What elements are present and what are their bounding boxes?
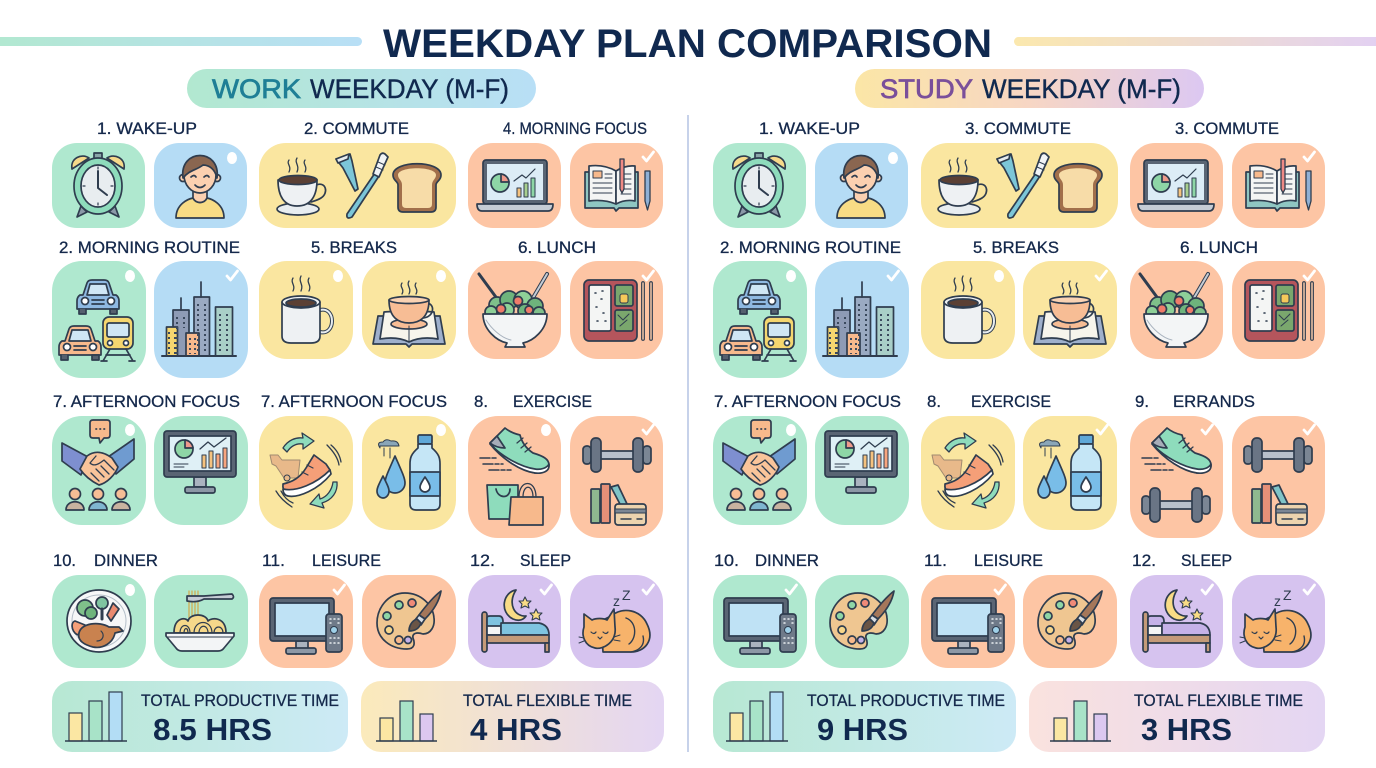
heading: 11. leisure: 11.	[262, 552, 285, 570]
title accent line: left	[0, 37, 362, 46]
stat card: total productive time	[713, 681, 1016, 752]
tile: tea on book	[1023, 261, 1117, 359]
tile: dumbbell, books, card	[570, 416, 663, 538]
heading: 9. errands	[1135, 393, 1255, 411]
panel: study weekday	[713, 69, 1325, 752]
tile: bed and moon	[1130, 575, 1223, 668]
heading: 10. dinner: DINNER	[94, 552, 158, 570]
tile: laptop chart	[1130, 143, 1223, 228]
tile: cart and shoe cycle	[921, 416, 1015, 530]
tile: alarm clock	[713, 143, 806, 228]
tile: tv and remote	[713, 575, 807, 668]
tile: water bottle	[1023, 416, 1117, 530]
heading: 3. commute: 3. COMMUTE	[965, 120, 1071, 138]
heading: 6. lunch: 6. LUNCH	[1180, 239, 1258, 257]
heading: 8. exercise: 8.	[927, 393, 941, 411]
heading: 11. leisure	[924, 552, 1043, 570]
tile: tea on book	[362, 261, 456, 359]
tile: person waking	[815, 143, 908, 228]
heading: 9. errands: 9.	[1135, 393, 1149, 411]
heading: 8. exercise: 8.	[474, 393, 488, 411]
tile: tv and remote	[921, 575, 1015, 668]
tile: sleeping cat: Z	[1283, 587, 1292, 603]
tile: coffee mug	[259, 261, 353, 359]
heading: 4. morning focus: 4. MORNING FOCUS	[503, 120, 647, 138]
stat card: total flexible time: TOTAL FLEXIBLE TIME	[1134, 692, 1303, 710]
heading: 10. dinner: 10.	[714, 552, 739, 570]
heading: 8. exercise	[474, 393, 592, 411]
stat card: total productive time	[52, 681, 348, 752]
tile: tv and remote	[259, 575, 353, 668]
tile: pasta	[154, 575, 248, 668]
heading: 12. sleep: SLEEP	[520, 552, 571, 570]
tile: city skyline	[815, 261, 909, 378]
heading pill: study weekday: STUDY	[880, 74, 973, 104]
bar chart icon	[376, 701, 437, 741]
tile: taxi, car, train	[52, 261, 146, 378]
tile: open book and pen	[1232, 143, 1325, 228]
tile: open book and pen	[570, 143, 663, 228]
tile: water bottle	[362, 416, 456, 530]
stat card: total flexible time: 4 HRS	[470, 712, 562, 747]
heading: 2. morning routine: 2. MORNING ROUTINE	[59, 239, 240, 257]
tile: coffee mug	[921, 261, 1015, 359]
title accent line: right	[1014, 37, 1376, 46]
heading: 8. exercise	[927, 393, 1051, 411]
heading: 5. breaks: 5. BREAKS	[311, 239, 397, 257]
stat card: total flexible time: 3 HRS	[1141, 712, 1232, 747]
heading: 12. sleep: SLEEP	[1181, 552, 1232, 570]
tile: cart and shoe cycle	[259, 416, 353, 530]
tile: sleeping cat	[570, 575, 663, 668]
tile: taxi, car, train	[713, 261, 807, 378]
panel: work weekday	[52, 69, 664, 752]
tile: alarm clock	[52, 143, 145, 228]
tile: bento and chopsticks	[1232, 261, 1325, 359]
tile: sleeping cat: Z	[622, 587, 631, 603]
stat card: total flexible time	[1029, 681, 1325, 752]
stat card: total productive time: 8.5 HRS	[153, 712, 272, 747]
heading: 12. sleep: 12.	[1132, 552, 1156, 570]
tile: paint palette	[362, 575, 456, 668]
heading: 8. exercise: EXERCISE	[513, 393, 592, 411]
stat card: total productive time: TOTAL PRODUCTIVE TIME	[807, 692, 1005, 710]
heading pill: work weekday: WORK	[212, 74, 301, 104]
tile: sleeping cat: z	[1274, 593, 1281, 609]
tile: handshake and team	[52, 416, 146, 525]
heading: 12. sleep	[470, 552, 571, 570]
heading: 11. leisure: LEISURE	[974, 552, 1043, 570]
tile: handshake and team	[713, 416, 807, 525]
tile: city skyline	[154, 261, 248, 378]
heading: 12. sleep	[1132, 552, 1232, 570]
heading: 11. leisure: LEISURE	[312, 552, 381, 570]
tile: sleeping cat: z	[613, 593, 620, 609]
column divider	[687, 115, 689, 752]
tile: sleeping cat	[1232, 575, 1325, 668]
heading pill: work weekday: WEEKDAY (M-F)	[310, 74, 509, 104]
stat card: total flexible time: TOTAL FLEXIBLE TIME	[463, 692, 632, 710]
stat card: total productive time: TOTAL PRODUCTIVE TIME	[141, 692, 339, 710]
tile: laptop chart	[468, 143, 561, 228]
heading: 9. errands: ERRANDS	[1173, 393, 1255, 411]
heading: 5. breaks: 5. BREAKS	[973, 239, 1059, 257]
tile: dumbbell, books, card	[1232, 416, 1325, 538]
heading: 2. commute: 2. COMMUTE	[304, 120, 409, 138]
heading: 7. afternoon focus: 7. AFTERNOON FOCUS	[714, 393, 901, 411]
tile: paint palette	[1023, 575, 1117, 668]
heading pill: work weekday	[187, 69, 536, 108]
tile: dinner plate	[52, 575, 146, 668]
stat card: total productive time: 9 HRS	[817, 712, 908, 747]
heading: 7. afternoon focus: 7. AFTERNOON FOCUS	[261, 393, 447, 411]
tile: running shoe and bags	[468, 416, 561, 538]
heading pill: study weekday: WEEKDAY (M-F)	[982, 74, 1181, 104]
tile: paint palette	[815, 575, 909, 668]
heading: 2. morning routine: 2. MORNING ROUTINE	[720, 239, 901, 257]
tile: monitor chart	[154, 416, 248, 525]
heading: 11. leisure: 11.	[924, 552, 947, 570]
tile: monitor chart	[815, 416, 909, 525]
heading: 10. dinner: 10.	[53, 552, 76, 570]
heading: 12. sleep: 12.	[470, 552, 495, 570]
tile: bed and moon	[468, 575, 561, 668]
tile: salad bowl	[1130, 261, 1223, 359]
bar chart icon	[1050, 701, 1111, 741]
heading pill: study weekday	[855, 69, 1204, 108]
heading: 11. leisure	[262, 552, 381, 570]
tile: salad bowl	[468, 261, 561, 359]
heading: 10. dinner: DINNER	[755, 552, 819, 570]
title: WEEKDAY PLAN COMPARISON	[383, 22, 992, 66]
tile: bento and chopsticks	[570, 261, 663, 359]
bar chart icon	[65, 692, 127, 741]
tile: running shoe and dumbbell	[1130, 416, 1223, 538]
heading: 10. dinner	[53, 552, 158, 570]
heading: 8. exercise: EXERCISE	[971, 393, 1051, 411]
tile: person waking	[154, 143, 247, 228]
heading: 10. dinner	[714, 552, 819, 570]
heading: 3. commute: 3. COMMUTE	[1175, 120, 1279, 138]
heading: 6. lunch: 6. LUNCH	[518, 239, 596, 257]
bar chart icon	[726, 692, 788, 741]
tile: coffee, toothbrush, toast	[921, 143, 1118, 228]
heading: 1. wake-up: 1. WAKE-UP	[759, 120, 860, 138]
heading: 7. afternoon focus: 7. AFTERNOON FOCUS	[53, 393, 240, 411]
tile: coffee, toothbrush, toast	[259, 143, 456, 228]
heading: 1. wake-up: 1. WAKE-UP	[97, 120, 197, 138]
stat card: total flexible time	[361, 681, 664, 752]
